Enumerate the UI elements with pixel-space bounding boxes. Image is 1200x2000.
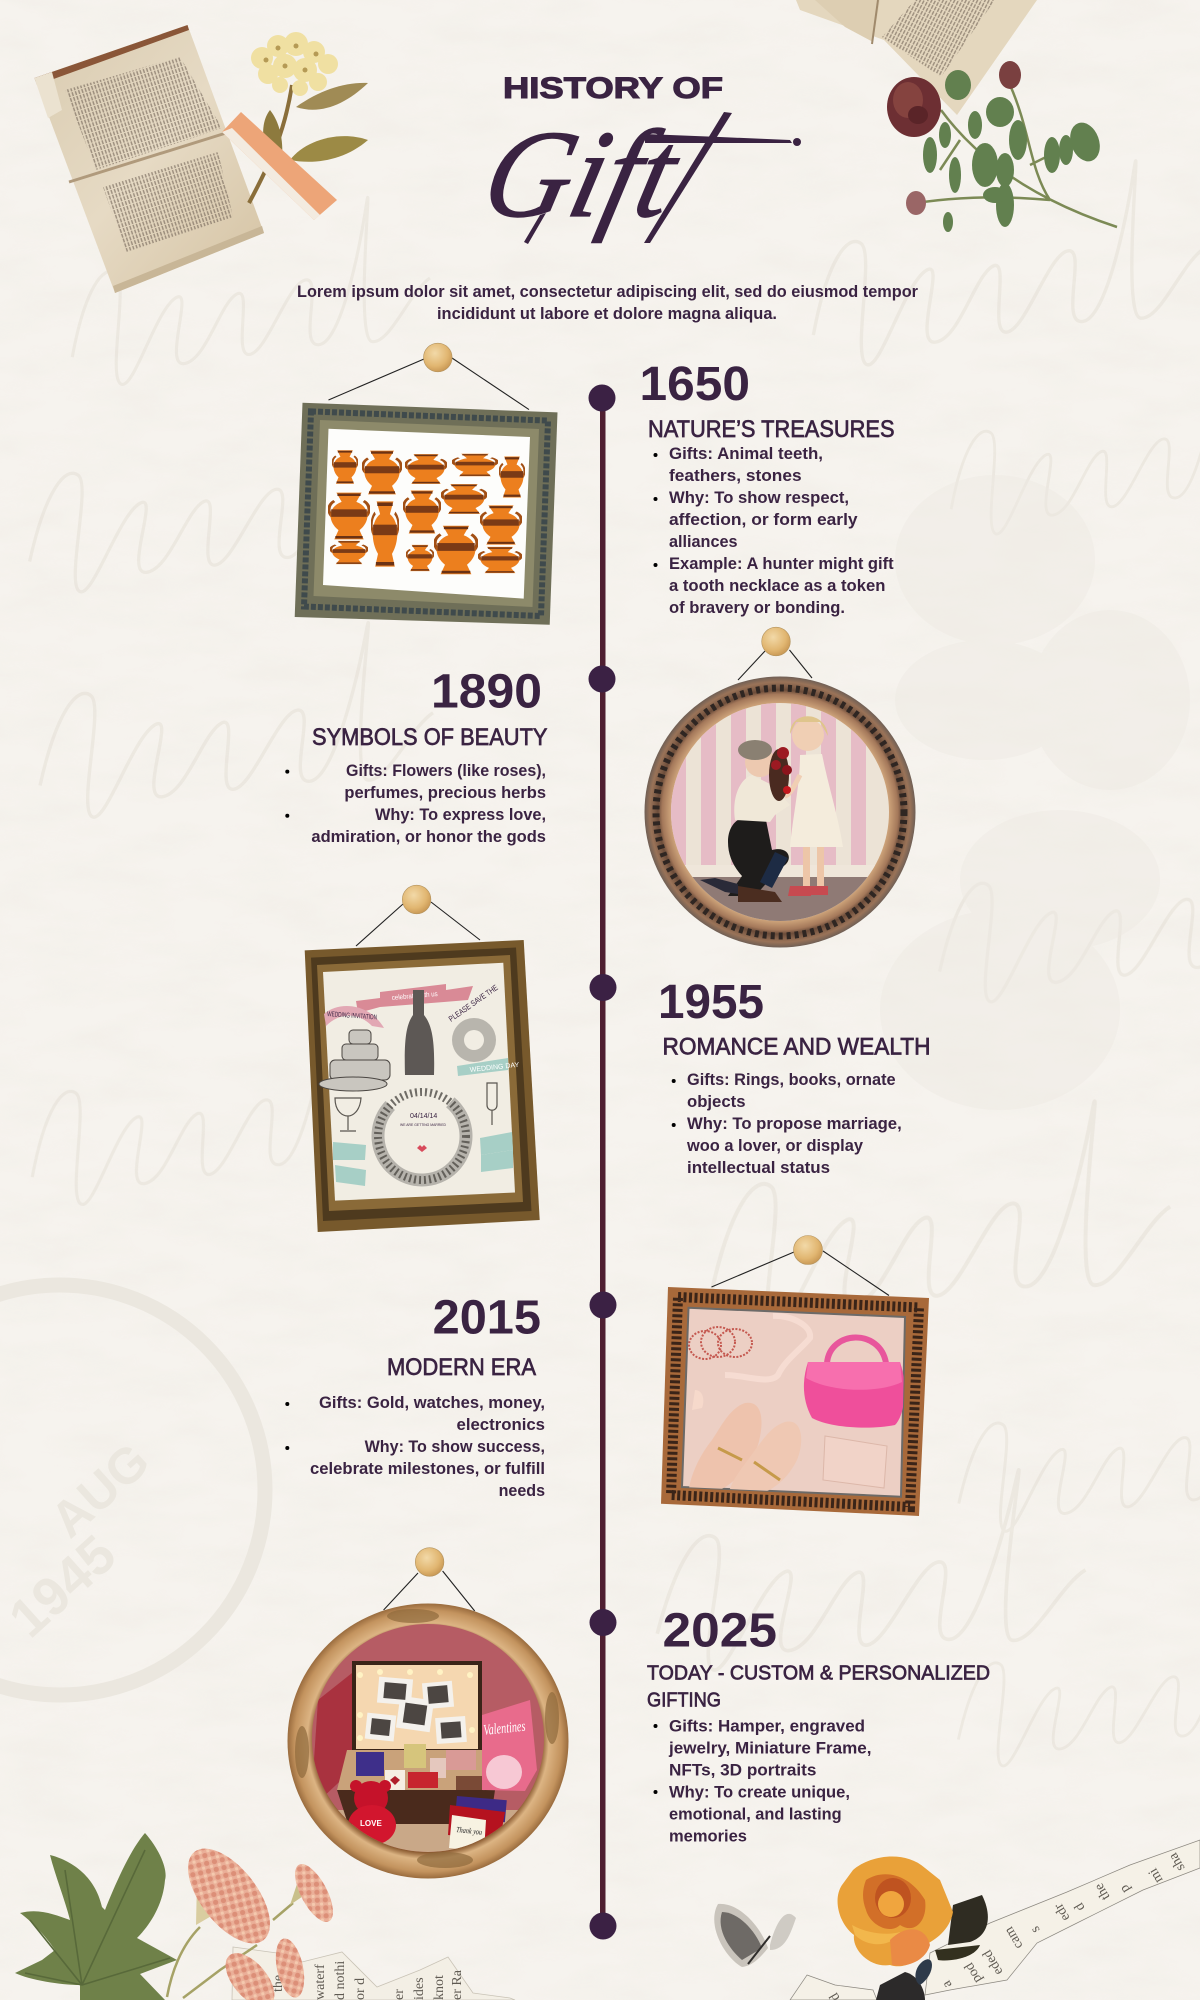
picture: round frame with valentine hamper	[288, 1548, 568, 1878]
intro text: Lorem ipsum dolor sit amet, consectetur adipiscing elit, sed do eiusmod tempor	[297, 283, 919, 301]
figure: boy kneeling	[700, 740, 790, 902]
invite ribbon: WEDDING INVITATION	[327, 1011, 377, 1021]
timeline dot 1650	[588, 384, 616, 412]
wreath: 04/14/14	[410, 1113, 437, 1120]
pin	[762, 627, 790, 656]
illustration: torn paper bottom right: edr	[1051, 1900, 1073, 1924]
illustration: open book top right	[796, 0, 1037, 115]
bullet list 1955: Why: To propose marriage,	[687, 1115, 902, 1133]
bullet list 2015: Why: To show success,	[365, 1438, 545, 1456]
bullet list 2015: celebrate milestones, or fulfill	[310, 1460, 545, 1478]
illustration: torn paper bottom right: d	[1072, 1900, 1088, 1914]
bullet list 2025: NFTs, 3D portraits	[669, 1762, 816, 1780]
illustration: pink blossoms	[167, 1835, 341, 2000]
illustration: red roses with leaves	[887, 61, 1117, 232]
heading symbols of beauty: SYMBOLS OF BEAUTY	[312, 724, 548, 751]
year 2025: 2025	[662, 1604, 777, 1658]
bullet list 2025: memories	[669, 1828, 747, 1846]
bullet list 1650: of bravery or bonding.	[669, 599, 845, 617]
heading today custom and personalized gifting: GIFTING	[647, 1688, 721, 1712]
intro text: incididunt ut labore et dolore magna aliqua.	[437, 305, 777, 323]
figure: girl with dress	[785, 716, 843, 896]
ribbon top	[356, 984, 473, 1013]
heading today custom and personalized gifting	[647, 1662, 990, 1712]
illustration: torn paper bottom left: ides	[412, 1977, 427, 2000]
bullet list 1650: Example: A hunter might gift	[669, 555, 894, 573]
bullet list 1650	[654, 445, 894, 617]
cake	[319, 1030, 390, 1091]
bouquet: PLEASE SAVE THE	[447, 983, 500, 1024]
valentine card: Valentines	[483, 1719, 526, 1739]
illustration: torn paper bottom right: s	[1028, 1923, 1043, 1936]
illustration: torn paper bottom left: or d	[353, 1978, 368, 2000]
illustration: torn paper bottom right: sha	[1166, 1849, 1188, 1874]
pin	[415, 1548, 444, 1576]
bullet list 1890: Gifts: Flowers (like roses),	[346, 762, 546, 780]
bullet list 2015: Gifts: Gold, watches, money,	[319, 1394, 545, 1412]
heading nature's treasures: NATURE’S TREASURES	[648, 416, 894, 443]
blossom clusters	[172, 1835, 341, 2000]
thank you note: Thank you	[456, 1825, 483, 1837]
bullet list 1650: a tooth necklace as a token	[669, 577, 885, 595]
bracelets	[689, 1327, 752, 1359]
illustration: torn paper bottom right: the	[1092, 1880, 1113, 1902]
glasses	[335, 1083, 497, 1131]
illustration: torn paper bottom right	[790, 1840, 1200, 2000]
timeline dot 1955	[590, 974, 616, 1001]
illustration: torn paper bottom left	[232, 1947, 515, 2000]
bullet list 1890	[285, 762, 546, 846]
stamp watermark	[0, 1285, 265, 1695]
heading today custom and personalized gifting: TODAY - CUSTOM & PERSONALIZED	[647, 1662, 990, 1685]
stamp watermark: AUG	[40, 1432, 160, 1548]
bouquet: WEDDING DAY	[469, 1062, 520, 1074]
bullet list 1650: feathers, stones	[669, 467, 802, 485]
illustration: torn paper bottom right: cam	[1002, 1924, 1026, 1952]
icon: butterfly	[714, 1904, 796, 1967]
title	[471, 72, 801, 244]
hamper lid with lights	[352, 1661, 482, 1751]
bullet list 1650: Why: To show respect,	[669, 489, 849, 507]
thank you note	[448, 1805, 505, 1852]
wreath: WE ARE GETTING MARRIED	[400, 1122, 446, 1127]
invite ribbon	[324, 1006, 384, 1028]
script heading: gift	[471, 106, 801, 244]
picture: framed wedding poster	[305, 885, 540, 1232]
illustration: torn paper bottom left: waterf	[313, 1964, 328, 2000]
bullet list 2025: jewelry, Miniature Frame,	[668, 1740, 872, 1758]
wallet	[823, 1436, 887, 1488]
ribbon top: celebrate with us	[392, 991, 438, 1002]
illustration: torn paper bottom left: knot	[432, 1975, 447, 2000]
illustration: torn paper bottom left: the	[271, 1975, 286, 1992]
bullet list 2025: Why: To create unique,	[669, 1784, 850, 1802]
bullet list 2025: emotional, and lasting	[669, 1806, 842, 1824]
valentine card	[482, 1700, 537, 1791]
illustration: torn paper bottom right: mi	[1146, 1865, 1166, 1886]
teddy bear: LOVE	[360, 1819, 382, 1828]
bullet list 1650: Gifts: Animal teeth,	[669, 445, 823, 463]
illustration: torn paper bottom right: a	[939, 1977, 955, 1990]
illustration: orange tape	[222, 112, 337, 220]
illustration: torn paper bottom left: er Ra	[450, 1969, 465, 2000]
bullet list 2015: electronics	[456, 1416, 545, 1434]
illustration: green leaf	[15, 1833, 177, 2000]
year 1890: 1890	[431, 666, 542, 718]
bullet list 1955: woo a lover, or display	[686, 1137, 864, 1155]
bullet list 2015: needs	[499, 1482, 545, 1500]
wreath	[360, 1074, 484, 1198]
pin	[424, 343, 452, 372]
bottle	[405, 990, 434, 1075]
illustration: open book top left	[34, 25, 264, 293]
heading modern era: MODERN ERA	[387, 1354, 536, 1381]
picture: framed pink accessories	[661, 1236, 929, 1516]
pin	[402, 885, 431, 914]
intro text	[297, 283, 919, 323]
illustration: torn paper bottom left: d nothi	[333, 1961, 348, 2000]
figure: rose bouquet	[769, 747, 792, 801]
timeline	[588, 384, 616, 1940]
illustration: torn paper bottom right: eded	[980, 1947, 1006, 1978]
pin	[794, 1236, 822, 1264]
ornament watermark	[880, 475, 1190, 1110]
bullet list 1955: intellectual status	[687, 1159, 830, 1177]
bullet list 1890: perfumes, precious herbs	[344, 784, 546, 802]
heading: history of: HISTORY OF	[503, 72, 723, 105]
timeline dot 2025	[590, 1609, 616, 1636]
illustration: torn paper bottom right: p	[1117, 1882, 1133, 1896]
illustration: pressed yellow flower	[249, 32, 368, 203]
panel: 2025 text	[647, 1604, 990, 1846]
bullet list 1955	[672, 1071, 902, 1177]
year 1955: 1955	[658, 976, 764, 1029]
script heading: gift: Gift	[471, 106, 693, 244]
panel: 2015 text	[285, 1292, 545, 1500]
loafers	[688, 1403, 801, 1497]
panel: 1650 text	[640, 358, 894, 617]
picture: round frame with children	[644, 627, 916, 948]
bullet list 1890: admiration, or honor the gods	[311, 828, 546, 846]
bullet list 1890: Why: To express love,	[375, 806, 546, 824]
bullet list 2015	[285, 1394, 545, 1500]
bullet list 1955: objects	[687, 1093, 746, 1111]
bullet list 2025: Gifts: Hamper, engraved	[669, 1717, 865, 1735]
bullet list 1955: Gifts: Rings, books, ornate	[687, 1071, 896, 1089]
teal banners	[333, 1132, 513, 1186]
bullet list 1650: affection, or form early	[669, 511, 858, 529]
bullet list 2025	[654, 1717, 872, 1846]
timeline dot 1890	[588, 666, 616, 692]
ribbon	[725, 1316, 810, 1379]
panel: 1890 text	[285, 666, 548, 846]
teddy bear	[348, 1780, 396, 1845]
bouquet	[447, 983, 520, 1076]
timeline end dot	[590, 1912, 616, 1940]
stamp watermark: 1945	[0, 1524, 127, 1649]
handbag	[804, 1337, 905, 1428]
illustration: torn paper bottom left: er	[392, 1989, 407, 2000]
illustration: orange rose with dark leaves	[838, 1856, 988, 2000]
hamper box and treats	[337, 1744, 495, 1824]
panel: 1955 text	[658, 976, 930, 1177]
drape	[312, 1673, 352, 1800]
illustration: torn paper bottom right: pod	[962, 1960, 985, 1986]
timeline dot 2015	[590, 1292, 616, 1318]
heading romance and wealth: ROMANCE AND WEALTH	[662, 1034, 930, 1060]
year 2015: 2015	[433, 1292, 541, 1344]
bullet list 1650: alliances	[669, 533, 738, 551]
picture: framed greek vases	[295, 343, 558, 625]
dairy milk bars	[455, 1796, 507, 1822]
year 1650: 1650	[640, 358, 750, 411]
